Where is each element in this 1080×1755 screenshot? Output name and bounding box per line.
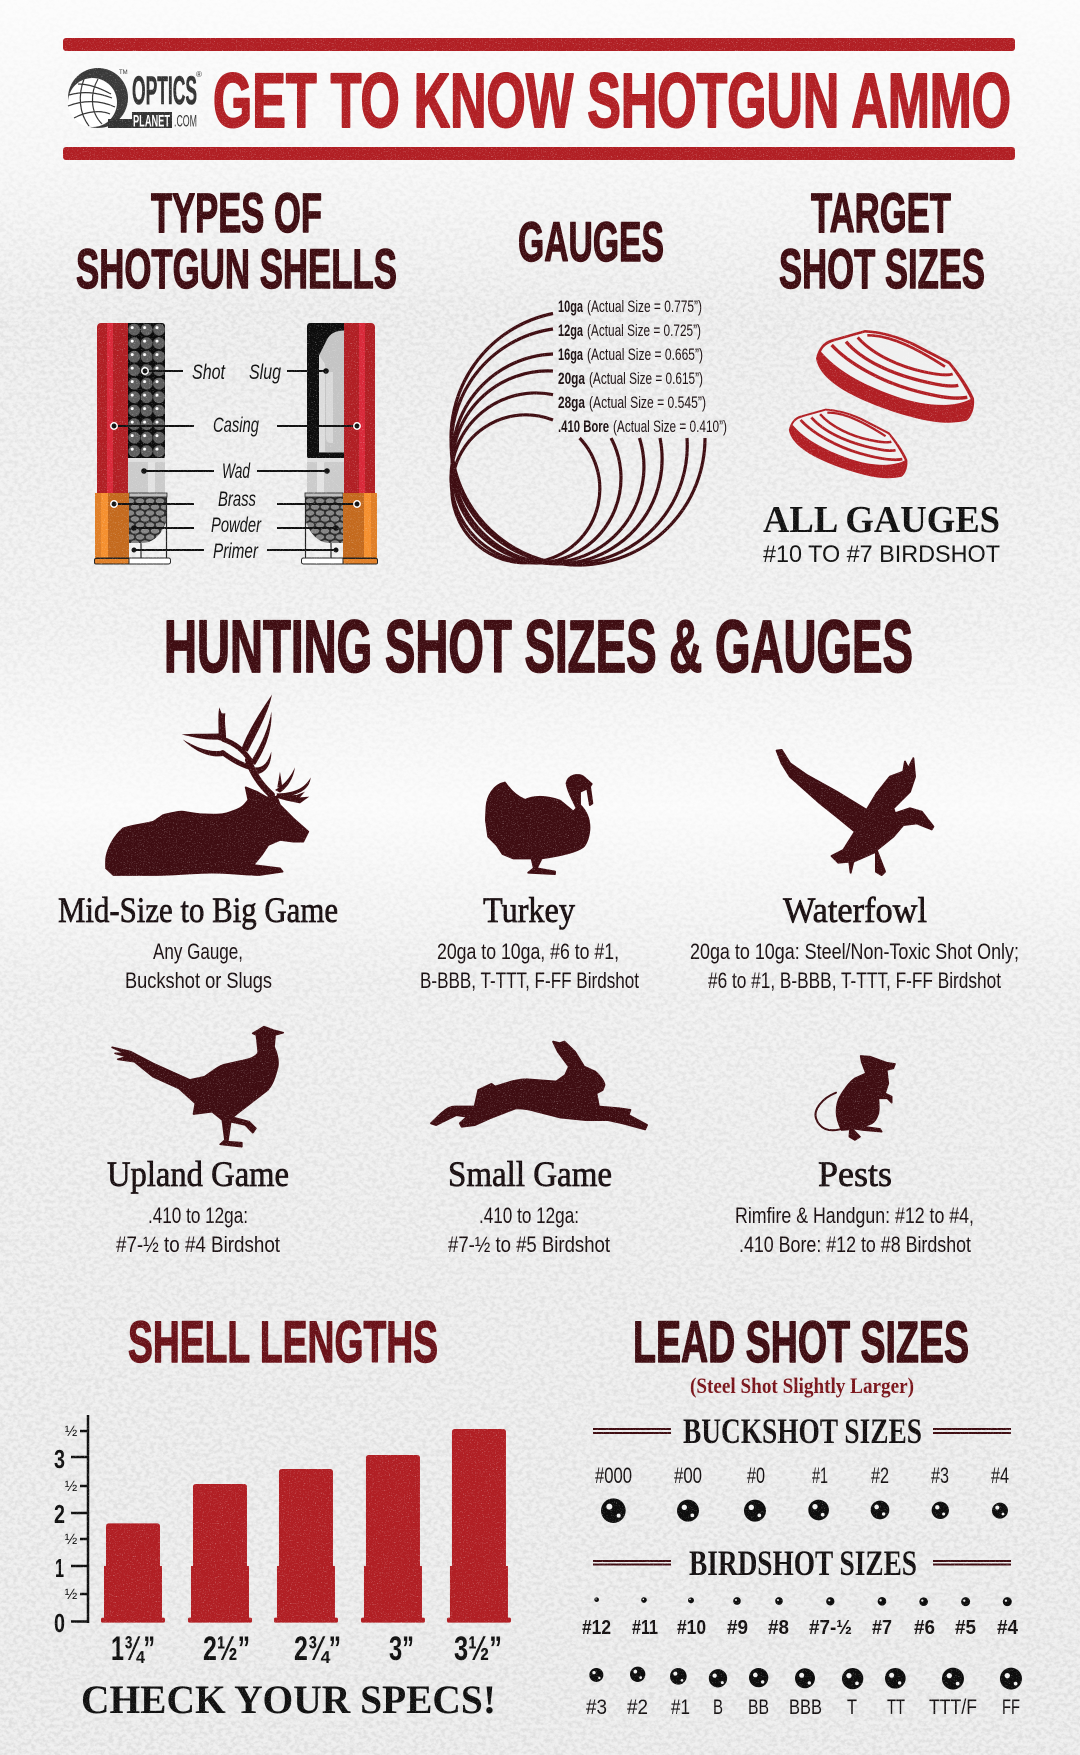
gauge labels: 16ga	[558, 345, 583, 364]
bar labels: 3½”	[454, 1630, 502, 1668]
gauge labels	[558, 297, 727, 436]
icon: rat	[816, 1056, 895, 1140]
birdshot labels, row two: #1	[671, 1696, 690, 1719]
header	[63, 38, 1015, 160]
description: B-BBB, T-TTT, F-FF Birdshot	[420, 968, 639, 993]
chart axis: ½	[65, 1531, 78, 1548]
label: upland game: Upland Game	[107, 1154, 289, 1194]
label: pests: Pests	[818, 1154, 892, 1194]
gauge labels: 10ga	[558, 297, 583, 316]
callout labels: Brass	[218, 488, 256, 511]
callout labels: Shot	[192, 361, 226, 384]
panel: turkey	[420, 775, 639, 993]
birdshot labels, row one: #4	[997, 1617, 1019, 1639]
label: small game: Small Game	[448, 1154, 612, 1194]
icon: duck	[777, 750, 933, 875]
logo: Optics Planet: PLANET	[133, 112, 170, 130]
bar labels: 3”	[389, 1630, 414, 1668]
chart axis: ½	[65, 1478, 78, 1495]
heading: shell lengths: SHELL LENGTHS	[128, 1310, 438, 1375]
icon: clay targets	[789, 330, 974, 478]
birdshot labels, row two: B	[713, 1696, 723, 1719]
birdshot labels, row one: #5	[955, 1617, 976, 1639]
gauge labels: (Actual Size = 0.545”)	[589, 393, 706, 412]
panel: waterfowl	[690, 750, 1019, 993]
description: 20ga to 10ga, #6 to #1,	[437, 939, 619, 964]
buckshot labels: #2	[871, 1463, 889, 1488]
gauge labels: (Actual Size = 0.410”)	[613, 417, 727, 436]
gauge labels: (Actual Size = 0.725”)	[587, 321, 701, 340]
birdshot labels, row one: #12	[582, 1617, 611, 1639]
panel: target shot sizes	[763, 181, 1000, 568]
description: .410 to 12ga:	[148, 1203, 248, 1228]
birdshot labels, row one: #9	[727, 1617, 748, 1639]
top red bar	[63, 38, 1015, 51]
heading: buckshot sizes: BUCKSHOT SIZES	[683, 1411, 922, 1451]
birdshot labels, row one: #7-½	[809, 1617, 852, 1639]
birdshot labels, row two: BB	[748, 1696, 769, 1719]
label: turkey: Turkey	[483, 890, 575, 930]
icon: turkey	[486, 775, 592, 874]
panel: shell lengths	[54, 1310, 511, 1722]
callout: check your specs: CHECK YOUR SPECS!	[81, 1677, 496, 1722]
gauge labels: 12ga	[558, 321, 583, 340]
buckshot labels: #1	[812, 1463, 828, 1488]
panel: lead shot sizes	[582, 1310, 1022, 1719]
heading: gauges: GAUGES	[518, 210, 664, 273]
chart axis: 1	[55, 1553, 64, 1583]
birdshot labels, row one	[582, 1617, 1019, 1639]
callout labels: Casing	[213, 414, 259, 437]
description: Rimfire & Handgun: #12 to #4,	[735, 1203, 974, 1228]
description: Any Gauge,	[153, 939, 243, 964]
icon: pheasant	[112, 1027, 283, 1147]
heading: types of shotgun shells: TYPES OF	[151, 181, 322, 244]
description: #7-½ to #5 Birdshot	[448, 1232, 610, 1257]
bottom red bar	[63, 147, 1015, 160]
gauge labels: (Actual Size = 0.665”)	[587, 345, 703, 364]
buckshot labels: #00	[674, 1463, 702, 1488]
heading: birdshot sizes: BIRDSHOT SIZES	[689, 1543, 917, 1583]
subheading: (Steel Shot Slightly Larger)	[690, 1373, 914, 1398]
birdshot labels, row two: TT	[887, 1696, 905, 1719]
birdshot labels, row two: BBB	[789, 1696, 822, 1719]
description: #7-½ to #4 Birdshot	[116, 1232, 280, 1257]
panel: mid-size to big game	[58, 695, 338, 993]
bar labels: 2¾”	[294, 1630, 341, 1668]
chart axis: ½	[65, 1423, 78, 1440]
gauge labels: .410 Bore	[558, 417, 609, 436]
birdshot labels, row two: TTT/F	[929, 1696, 977, 1719]
text: birdshot range: #10 TO #7 BIRDSHOT	[763, 541, 1000, 568]
diagram: shot shell	[94, 323, 170, 564]
description	[116, 1203, 280, 1257]
description	[735, 1203, 974, 1257]
chart axis: 2	[54, 1499, 65, 1529]
callout labels: Slug	[249, 361, 281, 384]
gauge labels: (Actual Size = 0.775”)	[587, 297, 702, 316]
birdshot labels, row one: #6	[914, 1617, 935, 1639]
birdshot labels, row one: #8	[768, 1617, 789, 1639]
header: OPTICS	[132, 69, 197, 113]
gauge circles	[451, 314, 705, 565]
description: Buckshot or Slugs	[125, 968, 272, 993]
buckshot labels: #4	[991, 1463, 1009, 1488]
panel: upland game	[107, 1027, 289, 1257]
description	[420, 939, 639, 993]
description	[125, 939, 272, 993]
bar labels	[111, 1630, 502, 1668]
birdshot labels, row two: T	[847, 1696, 857, 1719]
birdshot labels, row two: #2	[627, 1696, 648, 1719]
callout labels: Powder	[211, 514, 262, 537]
birdshot balls, row two	[589, 1667, 1022, 1690]
birdshot labels, row two	[586, 1696, 1020, 1719]
label: mid-size to big game: Mid-Size to Big Game	[58, 890, 338, 930]
buckshot labels: #0	[747, 1463, 765, 1488]
buckshot balls	[601, 1498, 1008, 1523]
heading: target shot sizes: TARGET	[811, 181, 951, 244]
panel: types of shotgun shells	[76, 181, 397, 564]
description	[690, 939, 1019, 993]
heading: buckshot sizes	[593, 1411, 1011, 1564]
chart axis: 3	[54, 1444, 65, 1474]
gauge labels: (Actual Size = 0.615”)	[589, 369, 703, 388]
description: .410 Bore: #12 to #8 Birdshot	[739, 1232, 971, 1257]
logo: Optics Planet: ®	[196, 70, 202, 79]
callout labels: Primer	[213, 540, 259, 563]
heading: types of shotgun shells: SHOTGUN SHELLS	[76, 237, 397, 300]
birdshot labels, row two: #3	[586, 1696, 607, 1719]
buckshot labels	[595, 1463, 1009, 1488]
bar labels: 1¾”	[111, 1630, 155, 1668]
logo: Optics Planet: .COM	[174, 112, 197, 130]
bar labels: 2½”	[203, 1630, 250, 1668]
birdshot labels, row one: #10	[677, 1617, 706, 1639]
diagram: slug shell	[302, 323, 378, 564]
chart axis: 0	[54, 1608, 65, 1638]
buckshot labels: #000	[595, 1463, 632, 1488]
gauge labels: 28ga	[558, 393, 585, 412]
panel: small game	[431, 1042, 647, 1257]
heading: types of shotgun shells	[76, 181, 397, 300]
chart axis	[54, 1415, 88, 1638]
panel: pests	[735, 1056, 974, 1257]
description: .410 to 12ga:	[479, 1203, 579, 1228]
label: waterfowl: Waterfowl	[783, 890, 927, 930]
logo: Optics Planet	[68, 68, 202, 130]
description	[448, 1203, 610, 1257]
birdshot labels, row two: FF	[1002, 1696, 1020, 1719]
logo: Optics Planet: TM	[119, 70, 128, 76]
panel: gauges	[451, 210, 727, 565]
description: #6 to #1, B-BBB, T-TTT, F-FF Birdshot	[708, 968, 1001, 993]
bar chart	[101, 1429, 511, 1623]
callout labels	[192, 361, 281, 563]
gauge labels: 20ga	[558, 369, 585, 388]
callout lines	[111, 368, 360, 552]
buckshot labels: #3	[931, 1463, 949, 1488]
chart axis: ½	[65, 1586, 78, 1603]
icon: rabbit	[431, 1042, 647, 1129]
birdshot balls, row one	[594, 1597, 1012, 1606]
heading: target shot sizes	[779, 181, 985, 300]
icon: elk	[106, 695, 311, 875]
birdshot labels, row one: #11	[632, 1617, 658, 1639]
callout labels: Wad	[222, 460, 251, 483]
birdshot labels, row one: #7	[872, 1617, 892, 1639]
text: all gauges: ALL GAUGES	[763, 499, 1000, 541]
